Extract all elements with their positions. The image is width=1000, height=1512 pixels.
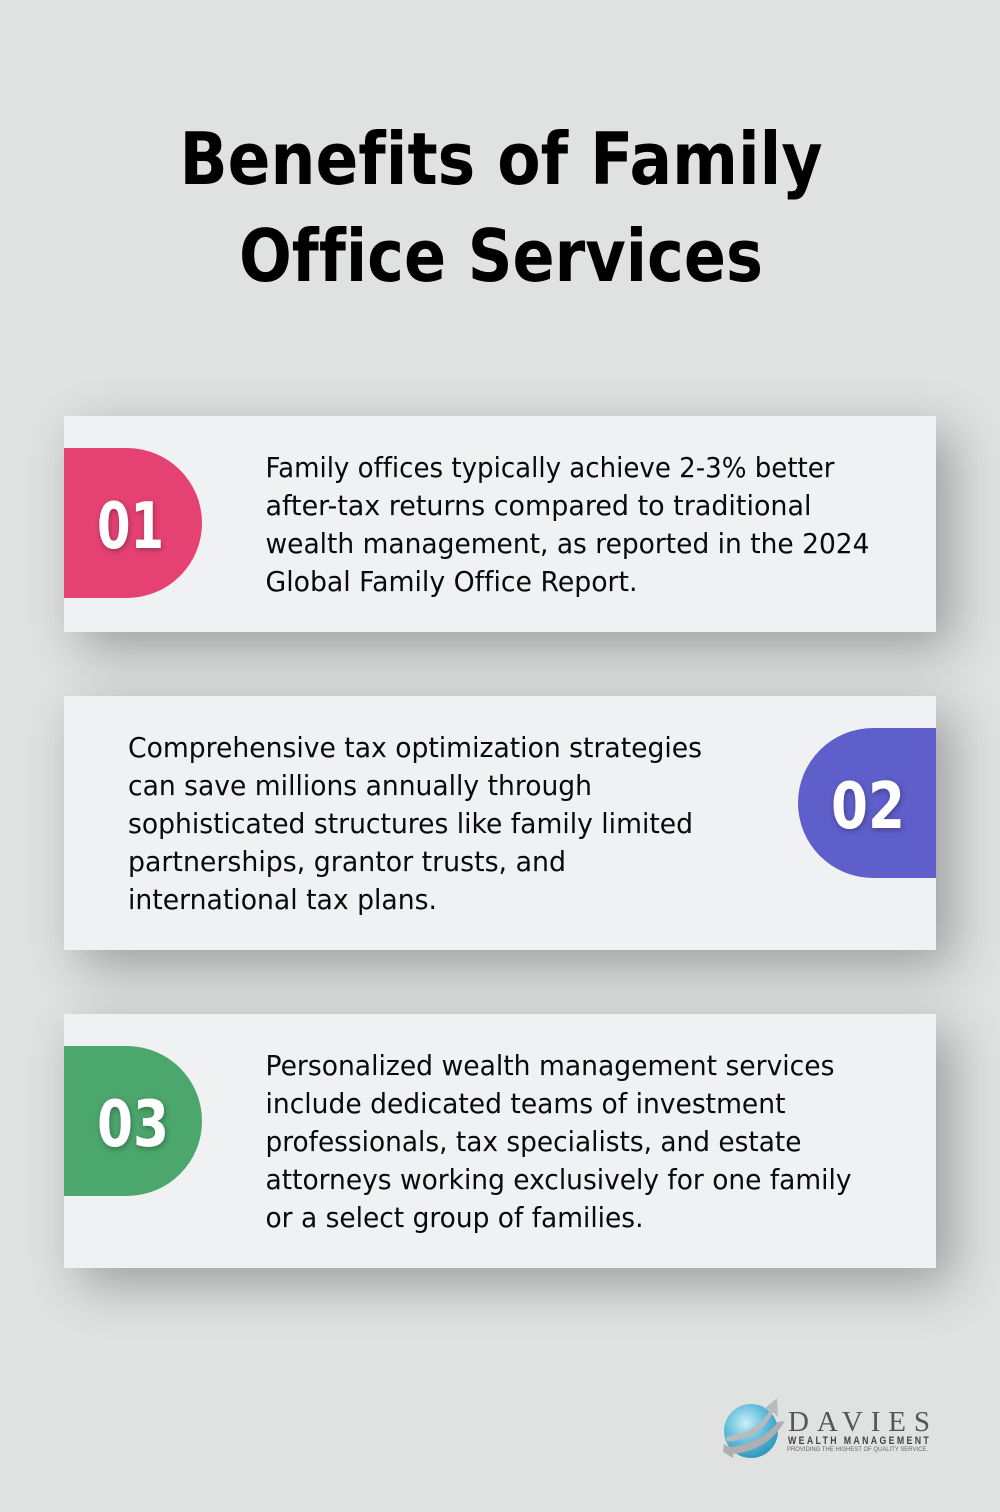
badge: 03 (64, 1046, 202, 1196)
text block: tax optimization: international tax plans. (128, 885, 437, 916)
text block: tax optimization: sophisticated structures like family limited (128, 809, 693, 840)
panel: benefit 03 (64, 1014, 936, 1268)
text block: personalized services: or a select group of families. (266, 1203, 644, 1234)
logo text: WEALTH MANAGEMENT (788, 1435, 929, 1447)
text block: after-tax returns (266, 453, 870, 598)
text block: personalized services: attorneys working exclusively for one family (266, 1165, 852, 1196)
text block: personalized services: include dedicated teams of investment (266, 1089, 786, 1120)
panel: benefit 02 (64, 696, 936, 950)
text block: after-tax returns: Family offices typically achieve 2-3% better (266, 453, 835, 484)
badge: 01: 01 (97, 490, 164, 564)
badge: 01 (64, 448, 202, 598)
title: Benefits of Family (180, 117, 822, 201)
text block: personalized services: Personalized wealth management services (266, 1051, 834, 1082)
logo text: DAVIES (788, 1406, 930, 1438)
badge: 02 (798, 728, 936, 878)
panel: benefit 01 (64, 416, 936, 632)
text block: personalized services (266, 1051, 852, 1234)
text block: tax optimization (128, 733, 702, 916)
badge: 02: 02 (831, 770, 905, 844)
badge: 03: 03 (97, 1088, 169, 1162)
text block: tax optimization: can save millions annually through (128, 771, 592, 802)
text block: tax optimization: partnerships, grantor trusts, and (128, 847, 566, 878)
logo text: PROVIDING THE HIGHEST OF QUALITY SERVICE. (787, 1447, 928, 1453)
text block: personalized services: professionals, tax specialists, and estate (266, 1127, 802, 1158)
icon: globe with arrows (723, 1398, 785, 1458)
logo: Davies Wealth Management (723, 1398, 930, 1458)
text block: after-tax returns: wealth management, as reported in the 2024 (266, 529, 870, 560)
text block: tax optimization: Comprehensive tax optimization strategies (128, 733, 702, 764)
title (180, 117, 822, 298)
text block: after-tax returns: after-tax returns compared to traditional (266, 491, 812, 522)
title: Office Services (239, 214, 763, 298)
logo text (787, 1406, 930, 1453)
text block: after-tax returns: Global Family Office Report. (266, 567, 638, 598)
